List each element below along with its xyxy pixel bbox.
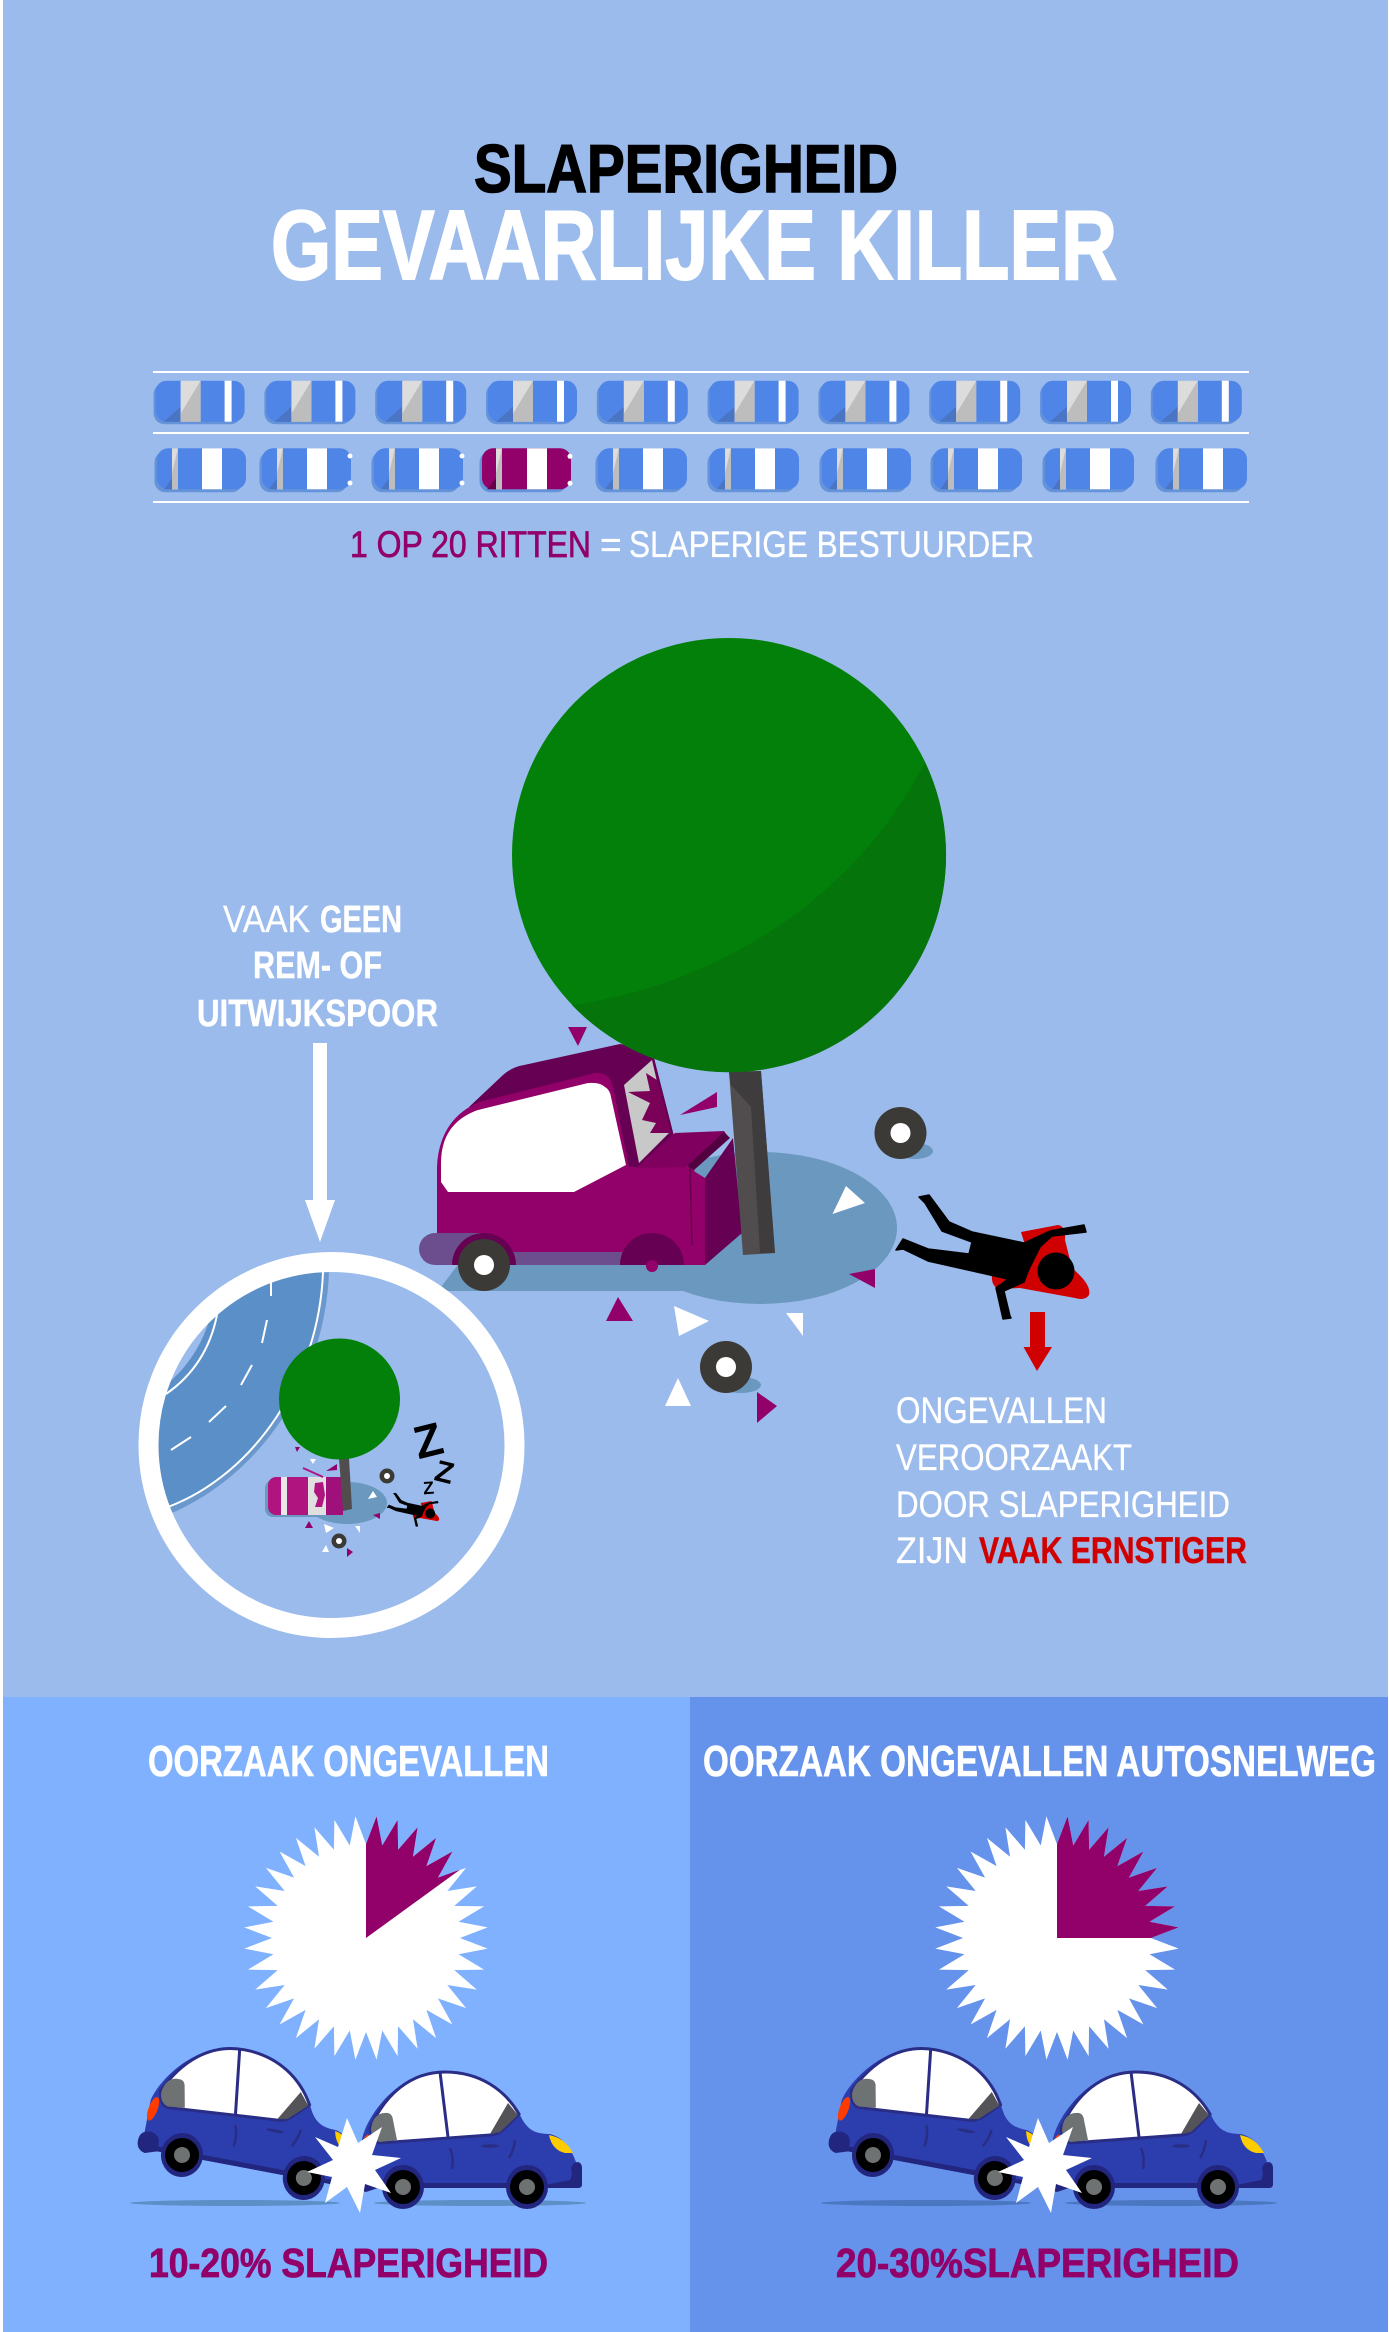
flying wheel upper — [874, 1107, 933, 1159]
small wheels — [332, 1468, 394, 1548]
title: GEVAARLIJKE KILLER — [271, 190, 1117, 300]
sleep letters: Z — [408, 1412, 448, 1469]
title — [271, 131, 1117, 300]
small trunk — [339, 1458, 352, 1511]
no-brake text: UITWIJKSPOOR — [197, 993, 438, 1035]
debris triangles — [568, 1027, 875, 1423]
severity text: DOOR SLAPERIGHEID — [896, 1484, 1230, 1525]
traffic caption: = — [600, 524, 622, 565]
crash scene: truck against tree — [419, 638, 1089, 1423]
severity text: ZIJN — [896, 1530, 968, 1571]
sleep letters — [408, 1412, 457, 1498]
red arrow down — [1024, 1312, 1052, 1371]
no-brake text: VAAK — [223, 899, 310, 941]
ground shadows — [130, 2200, 586, 2206]
small person — [387, 1493, 439, 1526]
pie star 15 percent — [244, 1816, 488, 2060]
traffic caption: 1 OP 20 RITTEN — [350, 524, 591, 565]
no-brake text — [197, 899, 438, 1035]
traffic caption: SLAPERIGE BESTUURDER — [629, 524, 1034, 565]
severity text: ONGEVALLEN — [896, 1390, 1107, 1431]
pie star 25 percent — [935, 1816, 1179, 2060]
panel: cause of accidents — [3, 1697, 690, 2332]
title: SLAPERIGHEID — [474, 131, 898, 207]
background panel: top section — [3, 0, 1388, 1697]
tree trunk — [729, 1071, 775, 1255]
flying wheel lower — [700, 1341, 761, 1393]
crashing cars — [133, 2032, 582, 2213]
small puddle — [307, 1482, 387, 1524]
circle inset: road overview — [140, 1240, 514, 1628]
ground shadows — [821, 2200, 1277, 2206]
road — [158, 1272, 329, 1513]
highlighted sleepy driver car — [480, 448, 572, 492]
small debris — [295, 1447, 380, 1557]
thrown person with blood — [896, 1195, 1089, 1319]
severity text: VEROORZAAKT — [896, 1437, 1132, 1478]
ground shadow puddle — [441, 1152, 897, 1304]
no-brake text: GEEN — [320, 899, 402, 941]
small car top view — [265, 1468, 347, 1517]
panel heading: OORZAAK ONGEVALLEN — [148, 1737, 549, 1786]
traffic lines and cars — [153, 372, 1249, 502]
small tree crown — [279, 1338, 400, 1460]
tree crown — [512, 638, 946, 1072]
no-brake text: REM- OF — [253, 945, 382, 987]
sleep letters: Z — [431, 1455, 457, 1491]
percent label: 10-20% SLAPERIGHEID — [149, 2240, 548, 2286]
white arrow to circle — [305, 1043, 335, 1242]
percent label: 20-30%SLAPERIGHEID — [836, 2240, 1239, 2286]
sleep letters: Z — [422, 1478, 435, 1498]
white ring — [148, 1262, 514, 1628]
panel: cause of motorway accidents — [690, 1697, 1388, 2332]
crashing cars — [824, 2032, 1273, 2213]
severity text: VAAK ERNSTIGER — [979, 1530, 1247, 1571]
purple truck — [419, 1044, 742, 1291]
severity text — [896, 1390, 1247, 1571]
traffic caption — [350, 524, 1034, 565]
